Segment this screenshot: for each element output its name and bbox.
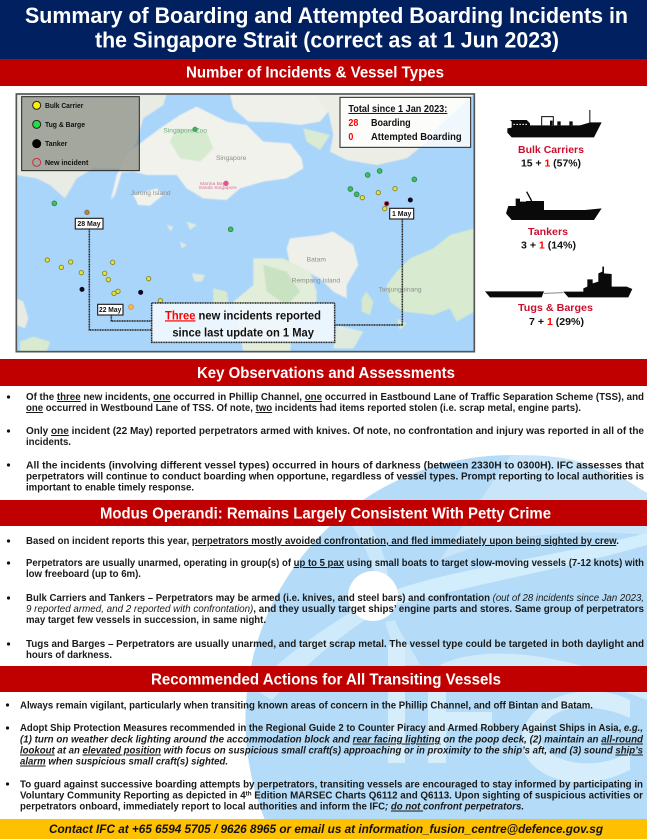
text block: recommended actions: [6, 700, 644, 812]
text block: key observations: [7, 392, 645, 494]
contact banner: Contact IFC at +65 6594 5705 / 9626 8965 or email us at information_fusion_centre@defence.gov.sg: [49, 822, 604, 836]
date label: 22 May: 22 May: [99, 307, 121, 314]
text block: modus operandi: Bulk Carriers and Tankers – Perpetrators may be armed (i.e. knives, and steel bars) and confrontation (out of 28 incidents since Jan 2023,: [26, 593, 644, 604]
title banner: [0, 0, 647, 59]
date label: 1 May: [390, 208, 414, 219]
text block: key observations: incidents.: [26, 437, 71, 448]
label: tankers: [521, 226, 576, 252]
total since 1 Jan box: Total since 1 Jan 2023:: [348, 104, 447, 115]
contact banner: [0, 819, 647, 839]
callout: three new incidents: since last update on 1 May: [172, 325, 314, 339]
text block: modus operandi: hours of darkness.: [26, 650, 112, 661]
label: tankers: Tankers: [528, 226, 568, 238]
text block: key observations: important to enable timely response.: [26, 482, 194, 494]
text block: modus operandi: Perpetrators are usually unarmed, operating in group(s) of up to 5 pax using small boats to target slow-moving vessels (7-12 knots) with: [26, 558, 644, 569]
label: tankers: 3 + 1 (14%): [521, 240, 576, 252]
legend: Tanker: [45, 139, 67, 148]
total since 1 Jan box: [340, 97, 471, 147]
map place labels: Rempang Island: [292, 277, 340, 284]
heading: key observations: Key Observations and Assessments: [197, 365, 455, 382]
text block: recommended actions: perpetrators onboard, immediately report to local authorities and inform the IFC; do not confront perpetrators.: [20, 802, 524, 812]
heading: modus operandi: Modus Operandi: Remains Largely Consistent With Petty Crime: [100, 506, 551, 522]
map place labels: Jurong Island: [131, 190, 171, 197]
incident dots: [45, 169, 417, 309]
icon: tug and barge: [485, 267, 632, 297]
date label: 22 May: [98, 304, 123, 315]
label: tugs and barges: [518, 302, 593, 328]
text block: recommended actions: alarm when suspicious small craft(s) sighted.: [20, 756, 228, 768]
legend: Bulk Carrier: [45, 101, 83, 110]
text block: recommended actions: Always remain vigilant, particularly when transiting known areas of concern in the Phillip Channel, and off Bintan and Batam.: [20, 700, 593, 712]
text block: modus operandi: 9 reported armed, and 2 reported with confrontation), and they usually target ships’ engine parts and stores. Same group of perpetrators: [26, 604, 644, 615]
legend: New incident: [45, 158, 89, 167]
panel: vessel types: [485, 110, 632, 328]
text block: modus operandi: Tugs and Barges – Perpetrators are usually unarmed, and target scrap metal. The vessel type could be targeted in both daylight and: [26, 639, 644, 650]
text block: key observations: one occurred in Westbound Lane of TSS. Of note, two incidents had items reported stolen (i.e. scrap metal, engine parts).: [26, 403, 581, 414]
text block: recommended actions: lookout at an elevated position with focus on suspicious small craft(s) approaching or in proximity to the ship’s aft, and (3) sound ship’s: [20, 746, 643, 756]
map place labels: Singapore Zoo: [163, 128, 207, 135]
text block: recommended actions: Adopt Ship Protection Measures recommended in the Regional Guide 2 to Counter Piracy and Armed Robbery Against Ships in Asia, e.g.,: [20, 723, 643, 734]
total since 1 Jan box: 0: [348, 132, 353, 143]
text block: recommended actions: th: [246, 790, 252, 798]
label: bulk carriers: 15 + 1 (57%): [521, 158, 581, 170]
total since 1 Jan box: 28: [348, 118, 359, 129]
legend: Tug & Barge: [45, 120, 85, 129]
map land: [16, 94, 474, 352]
total since 1 Jan box: Attempted Boarding: [371, 132, 462, 143]
text block: key observations: Of the three new incidents, one occurred in Phillip Channel, one occurred in Eastbound Lane of Traffic Separation Scheme (TSS), and: [26, 392, 644, 403]
map place labels: Sands Singapore: [199, 185, 237, 191]
heading: key observations: [0, 359, 647, 386]
text block: key observations: perpetrators will continue to conduct boarding when opportune, regardless of vessel types. Prompt reporting to local authorities is: [26, 472, 644, 482]
text block: modus operandi: Based on incident reports this year, perpetrators mostly avoided confrontation, and fled immediately upon being sighted by crew.: [26, 536, 619, 547]
date label: 28 May: [75, 218, 103, 229]
heading: recommended actions: Recommended Actions for All Transiting Vessels: [151, 672, 501, 688]
panel: incident map: [16, 94, 474, 352]
text block: recommended actions: Voluntary Community Reporting as depicted in 4: [20, 790, 255, 802]
map place labels: [131, 127, 422, 294]
label: tugs and barges: Tugs & Barges: [518, 302, 593, 314]
text block: modus operandi: may target few vessels in succession, in same night.: [26, 615, 266, 626]
connector lines: [89, 219, 402, 330]
label: tugs and barges: 7 + 1 (29%): [529, 316, 584, 328]
title banner: Summary of Boarding and Attempted Boarding Incidents in: [25, 3, 628, 28]
map place labels: Batam: [307, 256, 326, 263]
text block: modus operandi: low freeboard (up to 6m).: [26, 569, 141, 580]
total since 1 Jan box: Boarding: [371, 118, 411, 129]
heading: recommended actions: [0, 666, 647, 692]
callout: three new incidents: Three new incidents reported: [165, 308, 321, 322]
text block: modus operandi: [7, 536, 644, 661]
map place labels: Marina Bay: [200, 181, 226, 187]
label: bulk carriers: Bulk Carriers: [518, 144, 584, 156]
map place labels: Tanjungpinang: [378, 287, 422, 294]
callout: three new incidents: [152, 303, 335, 342]
heading: modus operandi: [0, 500, 647, 526]
legend: [22, 97, 139, 171]
text block: key observations: All the incidents (involving different vessel types) occurred in hours of darkness (between 2330H to 0300H). IFC assesses that: [26, 460, 645, 472]
heading: number of incidents and vessel types: Number of Incidents & Vessel Types: [186, 64, 444, 82]
label: bulk carriers: [518, 144, 584, 170]
background watermark: IFC logo: [245, 455, 647, 820]
icon: bulk carrier: [507, 110, 602, 137]
icon: tanker: [506, 192, 602, 220]
date label: 28 May: 28 May: [77, 221, 101, 228]
text block: recommended actions: (1) turn on weather deck lighting around the accommodation block and rear facing lighting on the poop deck, (2) maintain an all-round: [20, 734, 644, 746]
heading: number of incidents and vessel types: [0, 59, 647, 86]
map border: [16, 94, 474, 352]
map place labels: Singapore: [216, 155, 247, 162]
text block: key observations: Only one incident (22 May) reported perpetrators armed with knives. Of note, no confrontation and injury was reported in all of the: [26, 426, 644, 437]
title banner: the Singapore Strait (correct as at 1 Jun 2023): [95, 28, 559, 52]
date label: 1 May: 1 May: [392, 211, 411, 218]
